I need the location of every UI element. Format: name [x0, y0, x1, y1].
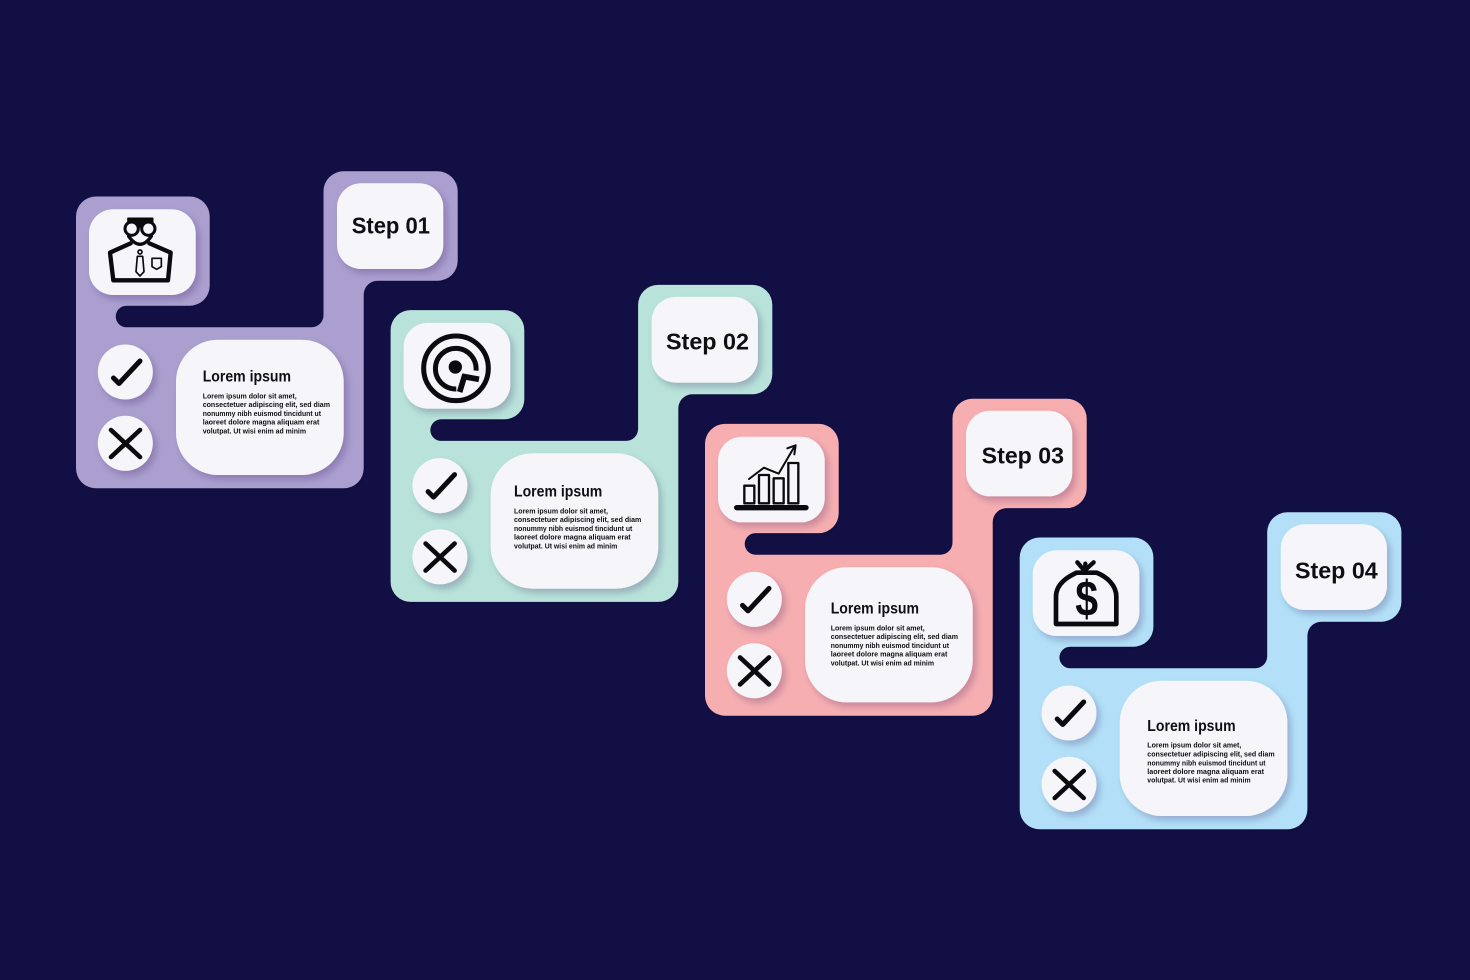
text block: consectetuer adipiscing elit, sed diam	[514, 515, 642, 524]
text block: nonummy nibh euismod tincidunt ut	[831, 641, 949, 650]
panel: step 04	[1020, 512, 1401, 829]
text card	[491, 453, 658, 589]
panel shape: purple	[76, 171, 458, 488]
icon card	[89, 209, 196, 295]
step label card	[966, 411, 1072, 496]
text block: Lorem ipsum	[203, 369, 291, 386]
icon card	[404, 323, 510, 409]
panel: step 02	[391, 285, 772, 602]
text block: nonummy nibh euismod tincidunt ut	[514, 524, 633, 533]
text card	[1120, 681, 1287, 816]
panel shape: teal	[391, 285, 772, 602]
text card	[805, 567, 973, 702]
check circle	[727, 572, 782, 627]
check circle	[412, 458, 467, 513]
panel shape: pink	[705, 399, 1087, 716]
cross circle	[412, 529, 467, 584]
text block	[1147, 718, 1275, 785]
icon: businessman	[110, 218, 171, 280]
step label: Step 02	[666, 329, 749, 355]
text block: nonummy nibh euismod tincidunt ut	[203, 409, 321, 418]
text block	[514, 484, 642, 550]
text block: consectetuer adipiscing elit, sed diam	[203, 400, 330, 409]
icon: cross	[111, 430, 140, 457]
icon: target	[424, 336, 488, 401]
icon: money bag: $	[1075, 571, 1098, 627]
step label card	[652, 297, 758, 383]
icon card	[718, 437, 825, 522]
icon: cross	[426, 544, 455, 571]
step label card	[1281, 524, 1387, 610]
text block: Lorem ipsum dolor sit amet,	[1147, 741, 1241, 750]
text block: laoreet dolore magna aliquam erat	[831, 650, 948, 659]
text block	[203, 369, 330, 435]
icon: cross	[1055, 771, 1084, 798]
cross circle	[98, 416, 153, 471]
text block: volutpat. Ut wisi enim ad minim	[831, 658, 934, 667]
icon card	[1033, 550, 1139, 636]
text block: laoreet dolore magna aliquam erat	[203, 418, 320, 427]
text block: Lorem ipsum	[514, 484, 602, 501]
icon: check	[114, 361, 140, 384]
cross circle	[727, 643, 782, 698]
text block: consectetuer adipiscing elit, sed diam	[831, 632, 958, 641]
check circle	[1042, 686, 1096, 740]
text block	[831, 601, 958, 667]
step label card	[337, 183, 443, 269]
text block: Lorem ipsum	[831, 601, 919, 618]
panel: step 01	[76, 171, 458, 488]
cross circle	[1042, 757, 1096, 812]
text card	[176, 340, 344, 475]
text block: Lorem ipsum dolor sit amet,	[514, 506, 608, 515]
icon: growth chart	[737, 445, 806, 508]
text block: volutpat. Ut wisi enim ad minim	[514, 541, 618, 550]
panel shape: blue	[1020, 512, 1401, 829]
step label: Step 01	[352, 212, 430, 238]
step label: Step 04	[1295, 557, 1378, 583]
text block: consectetuer adipiscing elit, sed diam	[1147, 750, 1275, 758]
text block: laoreet dolore magna aliquam erat	[514, 533, 631, 542]
icon: check	[1057, 702, 1084, 724]
icon: check	[428, 475, 455, 497]
text block: nonummy nibh euismod tincidunt ut	[1147, 758, 1266, 767]
text block: Lorem ipsum	[1147, 718, 1236, 735]
text block: volutpat. Ut wisi enim ad minim	[203, 426, 306, 435]
panel: step 03	[705, 399, 1087, 716]
step label: Step 03	[982, 443, 1064, 469]
text block: Lorem ipsum dolor sit amet,	[831, 623, 925, 632]
text block: laoreet dolore magna aliquam erat	[1147, 767, 1264, 776]
icon: cross	[740, 657, 769, 684]
text block: volutpat. Ut wisi enim ad minim	[1147, 776, 1251, 785]
text block: Lorem ipsum dolor sit amet,	[203, 391, 297, 400]
check circle	[98, 344, 153, 400]
icon: money bag	[1056, 562, 1116, 627]
icon: check	[742, 588, 769, 611]
